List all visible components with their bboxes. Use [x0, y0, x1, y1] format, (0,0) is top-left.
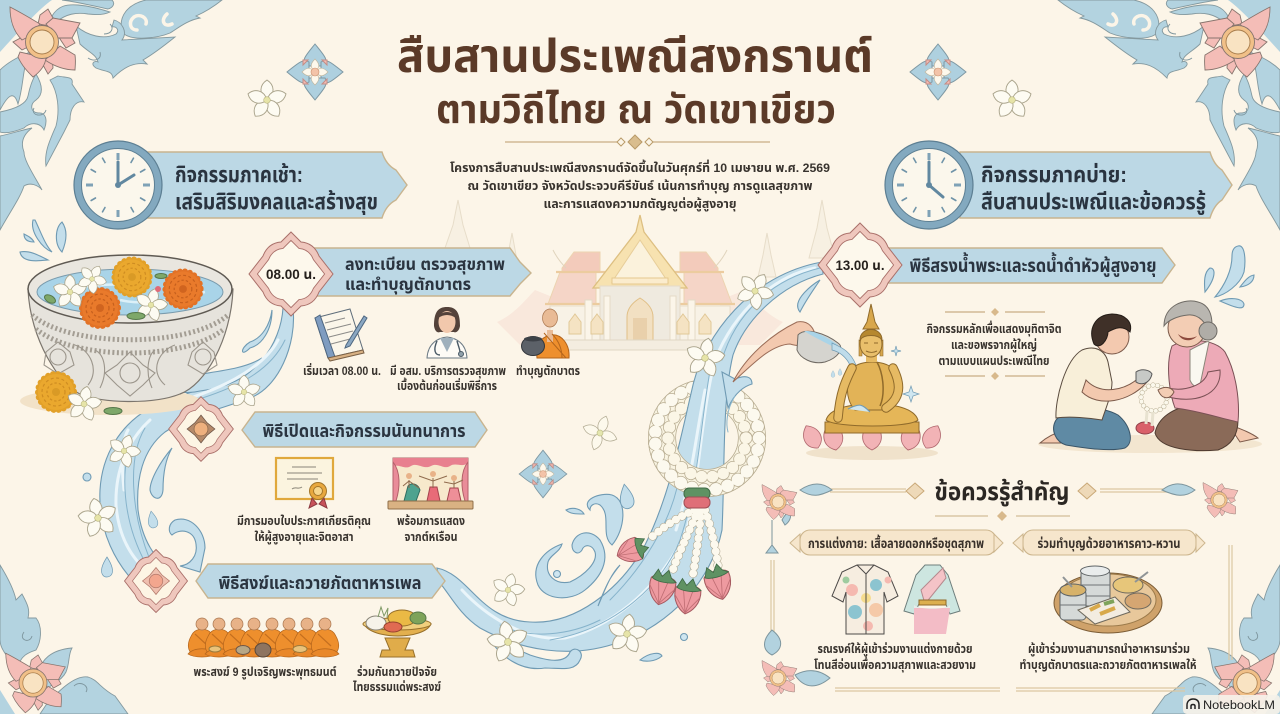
- pouring hand with bowl: [733, 322, 856, 382]
- pill: food: ร่วมทำบุญด้วยอาหารคาว-หวาน: [1038, 536, 1180, 551]
- heading divider: [935, 511, 1070, 521]
- step heading: ลงทะเบียน ตรวจสุขภาพ: [345, 255, 505, 275]
- step: opening ceremony: [169, 397, 487, 545]
- corner ornament: top right: [1058, 0, 1280, 230]
- morning section banner: เสริมสิริมงคลและสร้างสุข: [175, 189, 378, 215]
- step captions: เบื้องต้นก่อนเริ่มพิธีการ: [397, 377, 497, 393]
- panel frame: [771, 489, 1232, 691]
- pill: food: [1013, 530, 1205, 555]
- icon: stage performance: [388, 458, 473, 509]
- step captions: พร้อมการแสดง: [397, 514, 465, 528]
- step captions: [237, 514, 465, 545]
- icon: afternoon clock: [885, 141, 973, 229]
- step: 08.00 registration: [249, 232, 580, 393]
- temple illustration: [445, 200, 835, 350]
- icon: nine monks: [188, 618, 339, 657]
- step captions: [303, 363, 580, 393]
- icon: clipboard notebook: [315, 309, 367, 361]
- water splash: right of people: [1205, 246, 1254, 308]
- afternoon section banner: [960, 152, 1232, 218]
- morning section banner: กิจกรรมภาคเช้า:: [175, 162, 303, 187]
- young person pouring water over elder's hands: [1038, 314, 1262, 453]
- diamond ornament: [124, 550, 188, 612]
- time badge: 13.00 น.: [836, 258, 884, 273]
- time badge: 08.00 น.: [266, 267, 316, 282]
- title: สืบสานประเพณีสงกรานต์: [397, 30, 873, 82]
- panel heading: ข้อควรรู้สำคัญ: [934, 478, 1070, 507]
- step: 08.00 registration: และทำบุญตักบาตร: [345, 275, 471, 295]
- icon: certificate: [276, 458, 333, 508]
- step captions: พระสงฆ์ 9 รูปเจริญพระพุทธมนต์: [194, 665, 337, 680]
- pill: dress code: [790, 530, 1003, 555]
- time badge: [249, 232, 333, 316]
- morning section banner: [140, 152, 407, 218]
- corner ornament: bottom left: [0, 565, 128, 714]
- silver bowl with flowers: [20, 255, 233, 425]
- step banner: [196, 564, 445, 598]
- step captions: [194, 665, 441, 694]
- step captions: ร่วมกันถวายปัจจัย: [357, 665, 437, 679]
- step heading: พิธีเปิดและกิจกรรมนันทนาการ: [262, 421, 466, 441]
- panel captions: รณรงค์ให้ผู้เข้าร่วมงานแต่งกายด้วย: [818, 642, 972, 657]
- icon: monk with alms bowl: [522, 309, 569, 358]
- step captions: มีการมอบใบประกาศเกียรติคุณ: [237, 514, 371, 528]
- step captions: มี อสม. บริการตรวจสุขภาพ: [390, 364, 506, 378]
- corner ornament: top left: [0, 0, 222, 230]
- intro text: ณ วัดเขาเขียว จังหวัดประจวบคีรีขันธ์ เน้นการทำบุญ การดูแลสุขภาพ: [468, 179, 813, 194]
- watermark: NotebookLM: [1183, 695, 1280, 714]
- intro text: และการแสดงความกตัญญูต่อผู้สูงอายุ: [544, 197, 736, 212]
- diamond ornament: [169, 397, 233, 461]
- step captions: เริ่มเวลา 08.00 น.: [303, 363, 381, 378]
- panel captions: ทำบุญตักบาตรและถวายภัตตาหารเพลให้: [1020, 658, 1196, 672]
- panel captions: ผู้เข้าร่วมงานสามารถนำอาหารมาร่วม: [1028, 642, 1190, 657]
- icon: floral shirt: [832, 565, 898, 634]
- water splash: left of bowl: [20, 220, 66, 261]
- title: [397, 30, 873, 132]
- elder receiving blessing: [1136, 301, 1258, 451]
- step captions: ไทยธรรมแด่พระสงฆ์: [353, 680, 441, 694]
- afternoon section banner: สืบสานประเพณีและข้อควรรู้: [981, 189, 1206, 215]
- frame flowers: [762, 482, 1238, 696]
- activity description: ตามแบบแผนประเพณีไทย: [938, 354, 1050, 368]
- icon: thai dress: [904, 565, 960, 634]
- intro text: [450, 159, 830, 212]
- step heading: พิธีสรงน้ำพระและรดน้ำดำหัวผู้สูงอายุ: [910, 252, 1156, 277]
- step: merit and offering: [124, 550, 445, 694]
- step: 13.00 bathing ceremony: [818, 223, 1175, 307]
- title ornaments: flowers: [246, 44, 1033, 120]
- step heading: พิธีสงฆ์และถวายภัตตาหารเพล: [218, 573, 422, 593]
- icon: tiffin tray: [1054, 566, 1162, 633]
- icon: health volunteer: [427, 307, 467, 358]
- watermark: NotebookLM: NotebookLM: [1203, 700, 1275, 712]
- step banner: [305, 248, 531, 296]
- time badge: [818, 223, 902, 307]
- step captions: ทำบุญตักบาตร: [516, 364, 580, 378]
- icon: pedestal tray of food: [363, 607, 431, 657]
- jasmine garland with lotus buds: [613, 438, 759, 616]
- intro text: โครงการสืบสานประเพณีสงกรานต์จัดขึ้นในวันศุกร์ที่ 10 เมษายน พ.ศ. 2569: [450, 159, 830, 175]
- pill: dress code: การแต่งกาย: เสื้อลายดอกหรือชุดสุภาพ: [808, 534, 984, 551]
- step captions: ให้ผู้สูงอายุและจิตอาสา: [254, 530, 354, 545]
- icon: morning clock: [74, 141, 162, 229]
- jasmine blossoms along the water: [73, 265, 782, 666]
- step captions: จากต์หเรือน: [404, 530, 458, 544]
- corner ornament: bottom right: [1152, 565, 1280, 714]
- afternoon section banner: กิจกรรมภาคบ่าย:: [981, 162, 1127, 187]
- panel captions: [814, 642, 1196, 672]
- water ribbon: centre: [437, 262, 823, 669]
- activity description: กิจกรรมหลักเพื่อแสดงมุทิตาจิต: [926, 320, 1062, 336]
- water ribbon: left: [83, 308, 294, 590]
- title: ตามวิถีไทย ณ วัดเขาเขียว: [436, 88, 836, 132]
- step banner: [880, 248, 1175, 283]
- panel: key knowledge: [762, 478, 1238, 696]
- panel captions: โทนสีอ่อนเพื่อความสุภาพและสวยงาม: [814, 656, 976, 672]
- step banner: [242, 412, 487, 447]
- activity description: และขอพรจากผู้ใหญ่: [951, 338, 1037, 353]
- golden Buddha on lotus: [799, 304, 945, 460]
- title divider: [505, 135, 770, 149]
- activity description: [926, 308, 1062, 380]
